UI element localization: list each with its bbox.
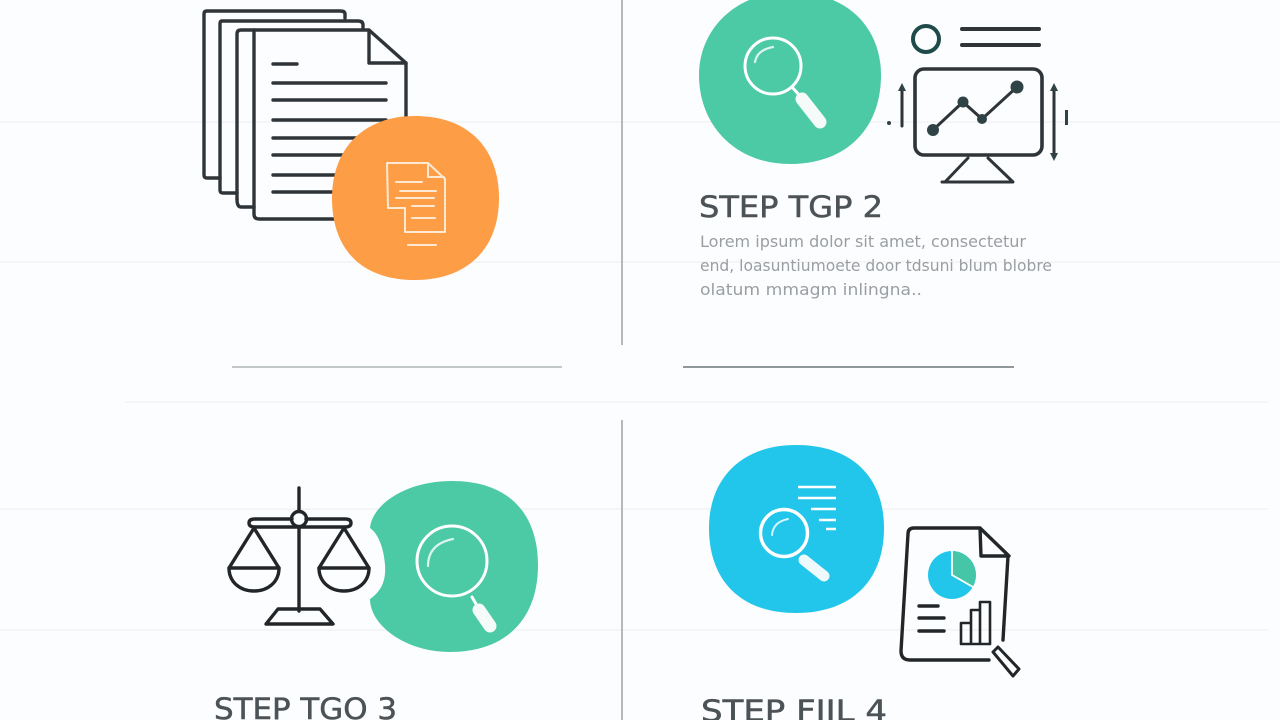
blue blob badge — [709, 445, 884, 613]
body text: step 2 — [700, 232, 1052, 299]
green blob badge — [699, 0, 881, 164]
body text: step 2: olatum mmagm inlingna.. — [700, 280, 922, 299]
pie chart — [928, 551, 976, 599]
icon: magnifying glass — [745, 38, 820, 122]
icon: report document — [901, 528, 1019, 676]
icon: white document — [387, 163, 445, 245]
panel: step 1 — [204, 11, 499, 280]
body text: step 2: Lorem ipsum dolor sit amet, consectetur — [700, 232, 1026, 251]
panel: step 3 — [214, 481, 538, 720]
icon: balance scales — [229, 488, 369, 624]
icon: magnifying glass — [417, 526, 490, 626]
orange blob badge — [332, 116, 499, 280]
green blob badge — [370, 481, 538, 652]
panel: step 4 — [701, 445, 1019, 720]
icon: chart monitor — [902, 26, 1054, 182]
body text: step 2: end, loasuntiumoete door tdsuni blum blobre — [700, 256, 1052, 275]
icon: magnifying glass with lines — [760, 487, 836, 576]
panel: step 2 — [699, 0, 1068, 299]
heading: step 2: STEP TGP 2 — [699, 190, 883, 224]
icon: stack of documents — [204, 11, 406, 219]
